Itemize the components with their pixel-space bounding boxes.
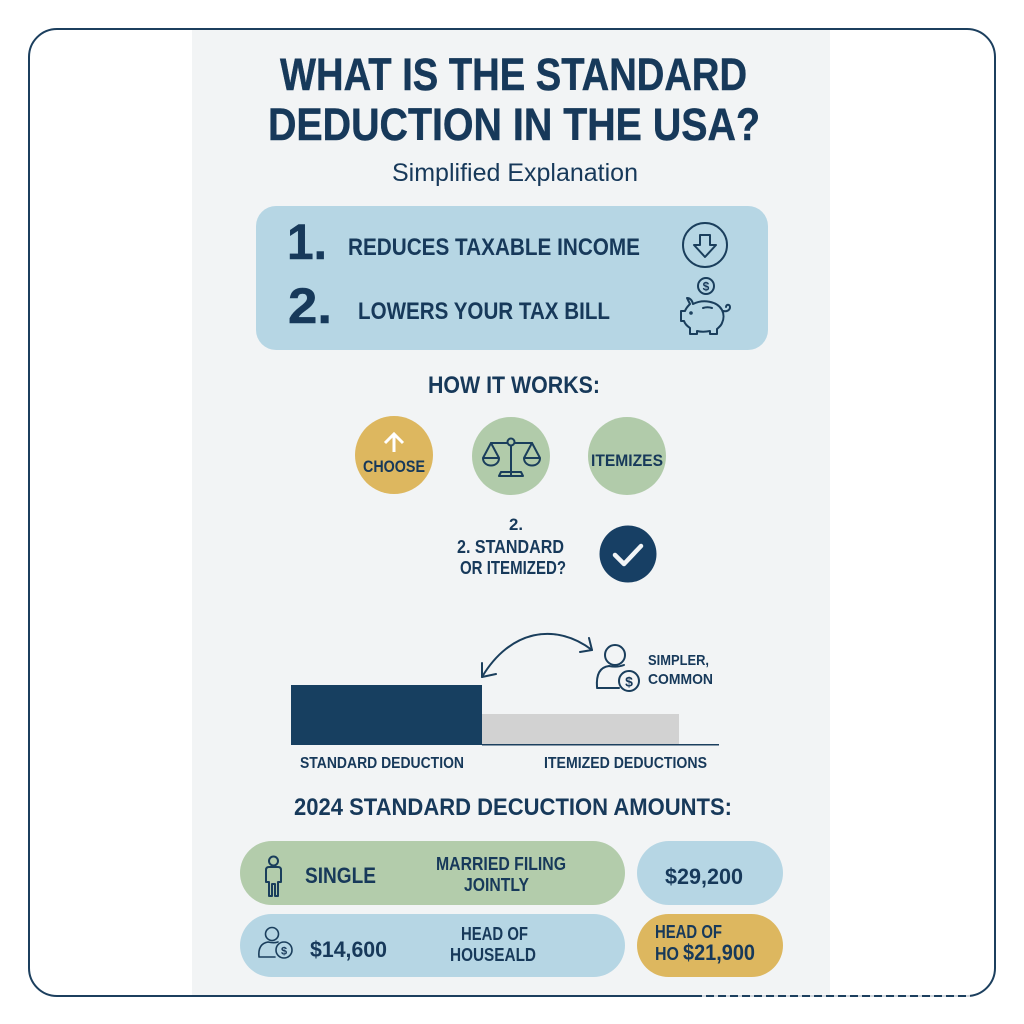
title bbox=[268, 49, 760, 150]
row: single and married filing jointly bbox=[240, 841, 625, 905]
panel: key benefits bbox=[256, 206, 768, 350]
question text: standard or itemized: OR ITEMIZED? bbox=[460, 558, 566, 578]
bar: standard deduction bbox=[291, 685, 482, 745]
pill: 29,200 amount: $29,200 bbox=[665, 864, 743, 889]
step: balance scale bbox=[472, 417, 550, 495]
benefit text: lowers your tax bill: LOWERS YOUR TAX BILL bbox=[358, 298, 610, 325]
label: itemized deductions: ITEMIZED DEDUCTIONS bbox=[544, 755, 707, 772]
row: single and married filing jointly: SINGLE bbox=[305, 863, 376, 888]
row: 14,600 and head of household bbox=[240, 914, 625, 977]
row: single and married filing jointly: JOINTLY bbox=[464, 875, 529, 895]
subtitle: Simplified Explanation bbox=[392, 159, 638, 187]
icon: standing person bbox=[266, 856, 281, 896]
arrow: curved double-headed bbox=[482, 634, 592, 677]
bar: itemized deductions bbox=[482, 714, 679, 744]
row: 14,600 and head of household: HOUSEALD bbox=[450, 945, 536, 965]
step: choose bbox=[355, 416, 433, 494]
icon: person with coin bbox=[259, 928, 292, 958]
pill: head of household amount: HO bbox=[655, 944, 679, 964]
callout: simpler, common: SIMPLER, bbox=[648, 652, 709, 669]
panel: central background bbox=[192, 29, 830, 996]
icon: down arrow in circle bbox=[683, 223, 727, 267]
icon: person with dollar coin: $ bbox=[625, 674, 633, 690]
icon: piggy bank with coin: $ bbox=[703, 280, 710, 294]
label: standard deduction: STANDARD DEDUCTION bbox=[300, 755, 464, 772]
heading: how it works: HOW IT WORKS: bbox=[428, 372, 600, 399]
heading: 2024 amounts: 2024 STANDARD DECUCTION AMOUNTS: bbox=[294, 794, 732, 821]
icon: person with coin: $ bbox=[281, 946, 287, 958]
icon: scales bbox=[483, 438, 540, 476]
callout: simpler, common bbox=[648, 652, 713, 688]
row: 14,600 and head of household: $14,600 bbox=[310, 937, 387, 962]
icon: check mark badge bbox=[600, 526, 656, 582]
pill: head of household amount: $21,900 bbox=[683, 940, 755, 965]
pill: 29,200 amount bbox=[637, 841, 783, 905]
callout: simpler, common: COMMON bbox=[648, 671, 713, 688]
row: single and married filing jointly: MARRIED FILING bbox=[436, 854, 566, 874]
step: choose: CHOOSE bbox=[363, 457, 425, 476]
pill: head of household amount bbox=[637, 914, 783, 977]
icon: piggy bank with coin bbox=[681, 278, 730, 334]
question text: standard or itemized: 2. STANDARD bbox=[457, 537, 564, 557]
icon: up arrow bbox=[385, 434, 403, 452]
title: DEDUCTION IN THE USA? bbox=[268, 99, 760, 150]
bar chart bbox=[291, 685, 719, 772]
icon: person with dollar coin bbox=[597, 645, 639, 691]
benefit number 1: 1. bbox=[287, 214, 327, 270]
question text: standard or itemized: 2. bbox=[509, 515, 523, 534]
benefit number 2: 2. bbox=[288, 278, 332, 334]
question text: standard or itemized bbox=[457, 515, 566, 578]
row: 14,600 and head of household: HEAD OF bbox=[461, 924, 528, 944]
step: itemizes: ITEMIZES bbox=[591, 451, 663, 470]
step: itemizes bbox=[588, 417, 666, 495]
benefit text: reduces taxable income: REDUCES TAXABLE INCOME bbox=[348, 234, 640, 261]
title: WHAT IS THE STANDARD bbox=[280, 49, 747, 100]
pill: head of household amount: HEAD OF bbox=[655, 922, 722, 942]
